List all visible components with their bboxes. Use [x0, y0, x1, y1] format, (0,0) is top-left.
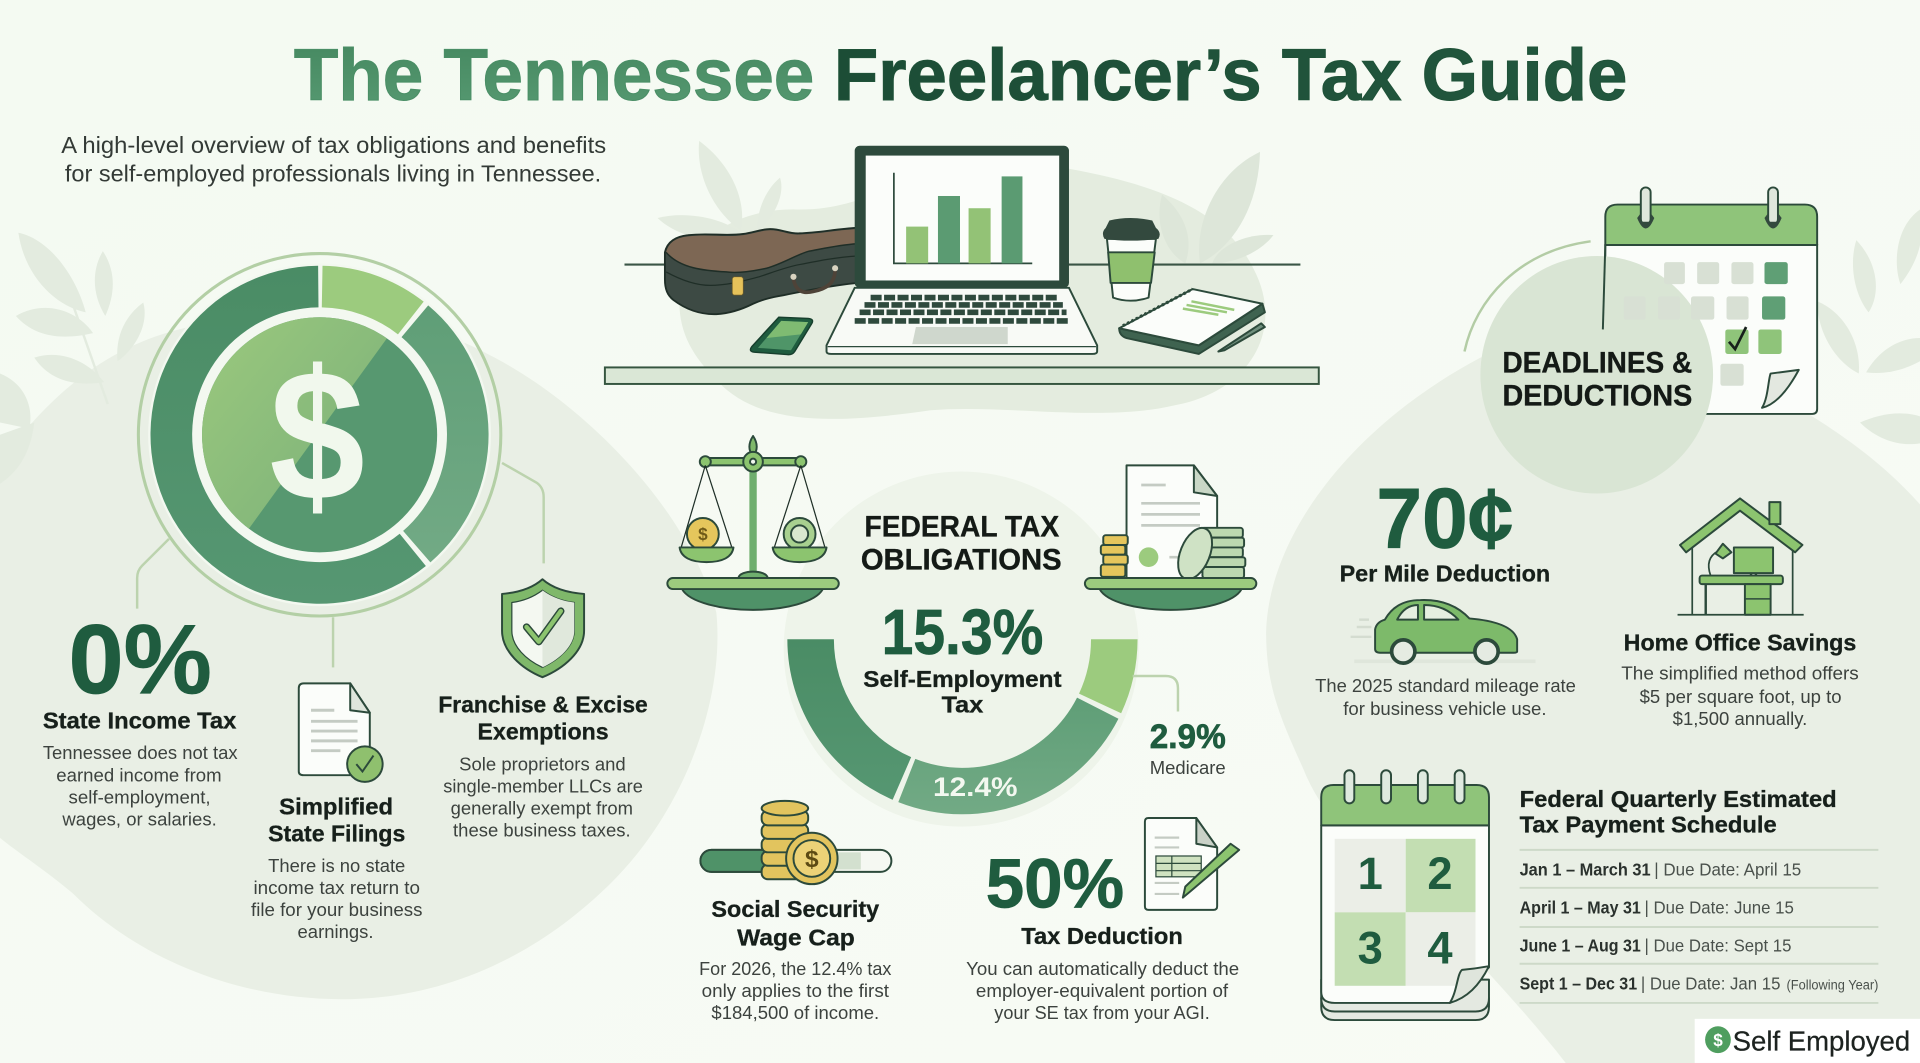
title: The Tennessee — [294, 33, 814, 116]
decorative leaves behind desk — [658, 141, 1273, 263]
block: franchise and excise exemptions: generally exempt from — [451, 797, 633, 818]
icon: shield with check — [502, 579, 584, 677]
schedule rows — [1520, 850, 1878, 1003]
stat: 15.3% self-employment tax: 15.3% — [882, 597, 1043, 668]
icon: wage cap bar and coins: $ — [805, 846, 819, 873]
stat: 50%: 50% — [986, 844, 1124, 922]
block: social security wage cap — [699, 896, 891, 1023]
quarter numbers: 2 — [1427, 848, 1453, 899]
stat: 0% state income tax — [43, 604, 238, 829]
row: quarter 1: Jan 1 – March 31 — [1520, 860, 1651, 880]
icon: home office — [1678, 498, 1804, 615]
block: tax deduction: Tax Deduction — [1021, 923, 1183, 949]
decorative leaves top left — [0, 233, 145, 484]
schedule heading: Tax Payment Schedule — [1520, 812, 1777, 838]
subtitle: for self-employed professionals living in Tennessee. — [65, 160, 601, 186]
block: tax deduction: You can automatically deduct the — [966, 958, 1239, 979]
stat: 0% state income tax: earned income from — [56, 764, 222, 785]
row: quarter 2: | Due Date: June 15 — [1644, 898, 1794, 918]
block: simplified state filings: file for your business — [251, 899, 422, 920]
row: quarter 2: April 1 – May 31 — [1520, 898, 1641, 918]
schedule heading — [1520, 786, 1837, 838]
block: simplified state filings: State Filings — [268, 820, 405, 846]
phone — [750, 317, 813, 355]
title: Freelancer’s Tax Guide — [834, 33, 1627, 116]
stat: 0% state income tax: self-employment, — [69, 786, 211, 807]
donut segment: dark — [150, 266, 426, 604]
icon: form and pencil — [1145, 818, 1239, 910]
heading: federal tax obligations: OBLIGATIONS — [861, 543, 1062, 576]
block: home office savings: Home Office Savings — [1624, 629, 1856, 655]
block: home office savings: $1,500 annually. — [1673, 708, 1807, 729]
row: quarter 4: Sept 1 – Dec 31 — [1520, 973, 1637, 993]
icon: balance scale: $ — [698, 524, 708, 544]
logo: self employed: $ — [1713, 1030, 1723, 1050]
block: franchise and excise exemptions — [438, 692, 648, 840]
row: quarter 3 — [1520, 936, 1792, 956]
block: franchise and excise exemptions: these business taxes. — [453, 819, 631, 840]
block: simplified state filings: earnings. — [298, 921, 373, 942]
subtitle: A high-level overview of tax obligations and benefits — [61, 132, 606, 158]
row: quarter 1: | Due Date: April 15 — [1654, 860, 1801, 880]
row: quarter 3: June 1 – Aug 31 — [1520, 936, 1641, 956]
decorative leaves top right — [1817, 209, 1920, 444]
quarter numbers: 1 — [1358, 848, 1383, 899]
segment: 12.4% — [898, 698, 1118, 814]
block: social security wage cap: Social Security — [711, 896, 880, 922]
donut segment: medium — [402, 305, 489, 562]
title — [294, 33, 1627, 116]
dollar sign: $ — [269, 333, 365, 540]
medicare connector — [1133, 676, 1178, 712]
stat: 0% state income tax: State Income Tax — [43, 708, 237, 734]
federal tax donut chart — [787, 639, 1138, 814]
heading: federal tax obligations: FEDERAL TAX — [864, 510, 1060, 543]
heading: federal tax obligations — [861, 510, 1062, 576]
stat: 70 cents per mile — [1340, 470, 1550, 587]
subtitle — [61, 132, 606, 186]
heading: deadlines and deductions — [1502, 346, 1692, 412]
block: social security wage cap: Wage Cap — [737, 924, 855, 950]
block: tax deduction: your SE tax from your AGI. — [994, 1002, 1210, 1023]
row: quarter 4: (Following Year) — [1787, 977, 1878, 992]
text: mileage rate: for business vehicle use. — [1343, 698, 1547, 719]
icon: balance scale — [667, 436, 839, 610]
block: franchise and excise exemptions: Sole proprietors and — [459, 753, 626, 774]
label: 12.4%: 12.4% — [933, 772, 1018, 802]
block: home office savings — [1621, 629, 1859, 729]
notebook and pen — [1119, 289, 1265, 354]
laptop — [827, 146, 1097, 354]
stat: 70 cents per mile: Per Mile Deduction — [1340, 561, 1550, 587]
block: franchise and excise exemptions: single-member LLCs are — [443, 775, 643, 796]
stat: 0% state income tax: 0% — [69, 604, 212, 714]
block: home office savings: $5 per square foot, up to — [1640, 686, 1842, 707]
block: simplified state filings: income tax return to — [253, 877, 420, 898]
logo: self employed — [1695, 1019, 1920, 1063]
schedule heading: Federal Quarterly Estimated — [1520, 786, 1837, 812]
block: tax deduction: employer-equivalent portion of — [976, 980, 1229, 1001]
icon: document with check — [299, 683, 383, 782]
block: social security wage cap: For 2026, the 12.4% tax — [699, 958, 891, 979]
block: franchise and excise exemptions: Franchise & Excise — [438, 692, 648, 718]
row: quarter 4 — [1520, 973, 1878, 993]
row: quarter 2 — [1520, 898, 1794, 918]
stat: 0% state income tax: wages, or salaries. — [61, 808, 217, 829]
quarter numbers: 3 — [1358, 923, 1383, 974]
segment: 2.9% medicare — [1079, 639, 1138, 713]
text: mileage rate: The 2025 standard mileage rate — [1315, 675, 1576, 696]
quarter numbers: 4 — [1427, 923, 1453, 974]
stat: 15.3% self-employment tax: Self-Employment — [863, 666, 1062, 692]
stat: 70 cents per mile: 70¢ — [1376, 470, 1513, 566]
icon: quarterly calendar — [1321, 770, 1489, 1020]
row: quarter 4: | Due Date: Jan 15 — [1641, 973, 1781, 993]
stat: 15.3% self-employment tax: Tax — [942, 692, 984, 718]
block: simplified state filings: Simplified — [279, 793, 393, 819]
icon: wall calendar top right — [1464, 187, 1817, 494]
stat: 2.9% medicare: Medicare — [1150, 757, 1226, 778]
heading: deadlines and deductions: DEDUCTIONS — [1502, 379, 1692, 412]
state tax donut chart — [138, 254, 501, 616]
block: home office savings: The simplified method offers — [1621, 663, 1859, 684]
block: social security wage cap: $184,500 of income. — [711, 1002, 879, 1023]
stat: 15.3% self-employment tax — [863, 597, 1062, 718]
text: mileage rate — [1315, 675, 1576, 719]
block: simplified state filings: There is no state — [268, 855, 405, 876]
stat: 2.9% medicare — [1150, 718, 1226, 778]
block: tax deduction — [966, 923, 1239, 1023]
icon: document and coin stacks on plate — [1085, 465, 1256, 610]
stat: 2.9% medicare: 2.9% — [1150, 718, 1226, 756]
desk scene illustration — [605, 146, 1319, 384]
coffee cup — [1103, 218, 1160, 301]
icon: car — [1351, 600, 1536, 663]
heading: deadlines and deductions: DEADLINES & — [1502, 346, 1692, 379]
block: social security wage cap: only applies to the first — [702, 980, 889, 1001]
row: quarter 1 — [1520, 860, 1801, 880]
logo: self employed: Self Employed — [1733, 1026, 1910, 1057]
block: simplified state filings — [251, 793, 422, 942]
donut segment: light — [322, 266, 424, 334]
segment: social security dark — [787, 639, 911, 800]
connector lines — [137, 463, 544, 667]
guitar case — [665, 228, 857, 314]
icon: wage cap bar and coins — [700, 801, 891, 884]
stat: 0% state income tax: Tennessee does not tax — [43, 742, 238, 763]
block: franchise and excise exemptions: Exemptions — [478, 719, 609, 745]
row: quarter 3: | Due Date: Sept 15 — [1644, 936, 1792, 956]
quarter numbers — [1358, 848, 1453, 974]
